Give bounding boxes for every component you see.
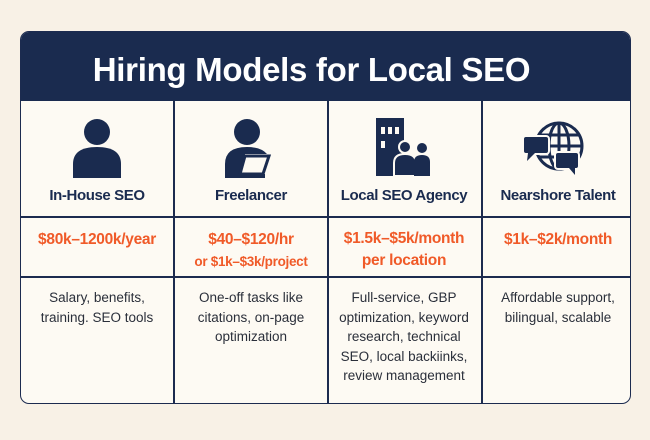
title: Hiring Models for Local SEO	[93, 51, 530, 88]
table card	[20, 31, 631, 404]
desc: agency	[339, 290, 469, 383]
desc: nearshore: Affordable support,	[501, 290, 615, 305]
desc: agency: optimization, keyword	[339, 310, 469, 324]
desc: agency: Full-service, GBP	[351, 290, 457, 305]
desc: nearshore	[501, 290, 615, 325]
desc: freelancer: One-off tasks like	[199, 290, 303, 305]
price: nearshore: $1k–$2k/month	[504, 231, 612, 248]
label: In-House SEO: In-House SEO	[49, 187, 145, 204]
icon: person	[73, 119, 121, 178]
label: Nearshore Talent: Nearshore Talent	[500, 187, 616, 204]
price: in-house: $80k–1200k/year	[38, 231, 156, 248]
price: freelancer: or $1k–$3k/project	[194, 254, 308, 269]
price: agency: per location	[362, 252, 446, 269]
price: freelancer: $40–$120/hr	[208, 231, 294, 248]
desc: agency: review management	[343, 368, 465, 383]
desc: nearshore: bilingual, scalable	[505, 310, 611, 324]
header bar	[21, 32, 630, 101]
desc: in-house: training. SEO tools	[41, 310, 153, 324]
price: freelancer	[194, 231, 308, 269]
price: agency	[344, 230, 464, 269]
desc: in-house: Salary, benefits,	[49, 290, 145, 305]
desc: in-house	[40, 290, 153, 325]
desc: freelancer: citations, on-page	[198, 310, 304, 324]
label: Freelancer: Freelancer	[215, 187, 287, 204]
price: agency: $1.5k–$5k/month	[344, 230, 464, 247]
desc: freelancer: optimization	[215, 329, 287, 344]
icon: agency building	[376, 118, 430, 176]
label: Local SEO Agency: Local SEO Agency	[341, 187, 467, 204]
desc: agency: SEO, local backiinks,	[341, 348, 467, 364]
desc: freelancer	[198, 290, 304, 344]
icon: freelancer with laptop	[225, 119, 271, 178]
icon: globe with chat bubbles	[524, 122, 584, 175]
desc: agency: research, technical	[347, 329, 461, 344]
